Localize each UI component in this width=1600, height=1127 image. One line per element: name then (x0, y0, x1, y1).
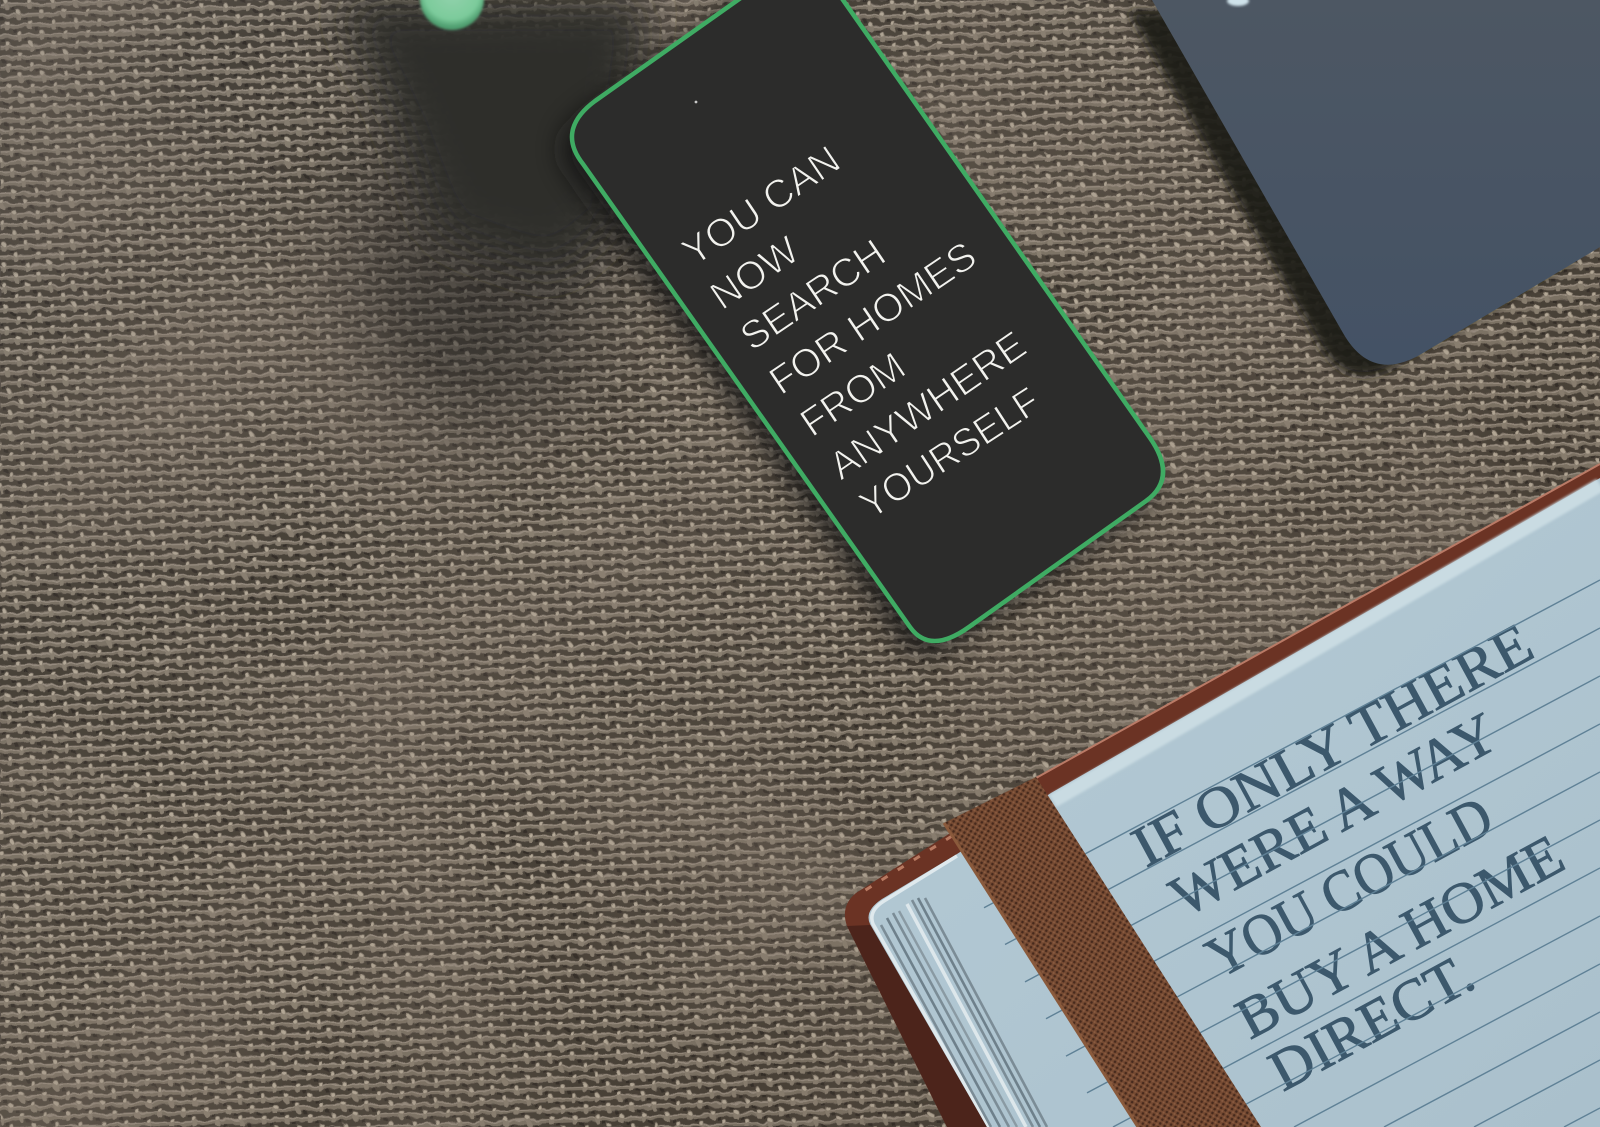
handwritten note: DIRECT. (1258, 940, 1484, 1103)
phone message: SEARCH (732, 231, 894, 359)
handwritten note: IF ONLY THERE (1121, 610, 1543, 879)
handwritten note: WERE A WAY (1159, 700, 1508, 929)
phone message: YOU CAN (674, 137, 848, 274)
phone message: FOR HOMES (761, 233, 984, 403)
phone message: NOW (702, 228, 808, 318)
handwritten note: BUY A HOME (1225, 822, 1574, 1051)
handwritten note: YOU COULD (1195, 783, 1503, 990)
phone message (674, 137, 1048, 528)
phone (562, 0, 1163, 653)
page stack edge (881, 898, 1047, 1127)
ruled lines (984, 580, 1600, 1127)
icon: green ball at top edge (420, 0, 484, 30)
phone message: ANYWHERE (821, 323, 1034, 488)
phone message: FROM (792, 344, 913, 445)
notebook (845, 464, 1600, 1127)
handwritten note (1121, 610, 1574, 1103)
notebook page (868, 478, 1600, 1127)
notebook cover (845, 464, 1600, 1127)
elastic band (944, 777, 1261, 1127)
blue card (1128, 0, 1600, 376)
phone message: YOURSELF (852, 379, 1048, 528)
